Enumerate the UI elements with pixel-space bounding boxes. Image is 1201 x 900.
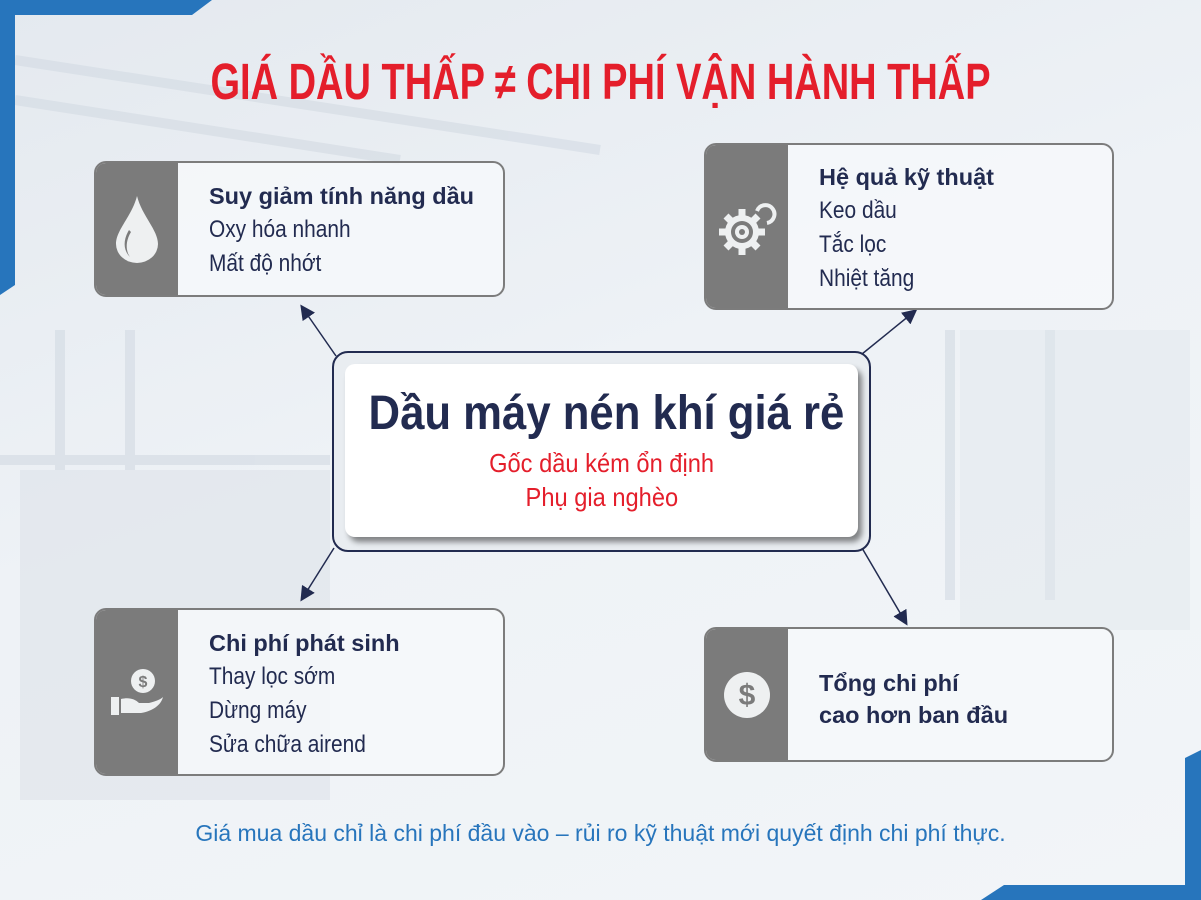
center card: [345, 364, 858, 537]
panel: hệ quả kỹ thuật: Nhiệt tăng: [819, 265, 914, 292]
panel: suy giảm tính năng dầu: Suy giảm tính năng dầu: [209, 183, 474, 209]
icon: dollar coin: [706, 629, 788, 760]
panel: tổng chi phí: Tổng chi phí: [819, 670, 959, 696]
corner frame: top-left: [0, 0, 212, 295]
panel: hệ quả kỹ thuật: Tắc lọc: [819, 231, 886, 258]
icon: oil drop: [96, 163, 178, 295]
panel: chi phí phát sinh: Chi phí phát sinh: [209, 630, 400, 656]
panel: hệ quả kỹ thuật: Hệ quả kỹ thuật: [819, 164, 994, 190]
icon: hand with coin: [96, 610, 178, 774]
panel: tổng chi phí: cao hơn ban đầu: [819, 702, 1008, 728]
panel: chi phí phát sinh: Thay lọc sớm: [209, 663, 335, 690]
panel: hệ quả kỹ thuật: [704, 143, 1114, 310]
center subtext: Gốc dầu kém ổn định: [489, 448, 714, 478]
panel: chi phí phát sinh: [94, 608, 505, 776]
title: GIÁ DẦU THẤP ≠ CHI PHÍ VẬN HÀNH THẤP: [210, 53, 991, 110]
center panel: [332, 351, 871, 552]
corner frame: bottom-right: [981, 750, 1201, 900]
center heading: Dầu máy nén khí giá rẻ: [369, 387, 844, 440]
icon: gears: [706, 145, 788, 308]
icon: dollar coin: $: [739, 678, 756, 712]
panel: chi phí phát sinh: Dừng máy: [209, 697, 307, 724]
footer note: Giá mua dầu chỉ là chi phí đầu vào – rủi ro kỹ thuật mới quyết định chi phí thực.: [195, 820, 1006, 846]
panel: suy giảm tính năng dầu: Mất độ nhớt: [209, 250, 321, 277]
center subtext: [489, 448, 714, 512]
panel: chi phí phát sinh: Sửa chữa airend: [209, 731, 366, 758]
panel: tổng chi phí: [704, 627, 1114, 762]
panel: suy giảm tính năng dầu: Oxy hóa nhanh: [209, 216, 351, 243]
panel: suy giảm tính năng dầu: [94, 161, 505, 297]
center subtext: Phụ gia nghèo: [525, 482, 678, 512]
icon: hand with coin: $: [139, 674, 148, 691]
panel: hệ quả kỹ thuật: Keo dầu: [819, 197, 897, 224]
